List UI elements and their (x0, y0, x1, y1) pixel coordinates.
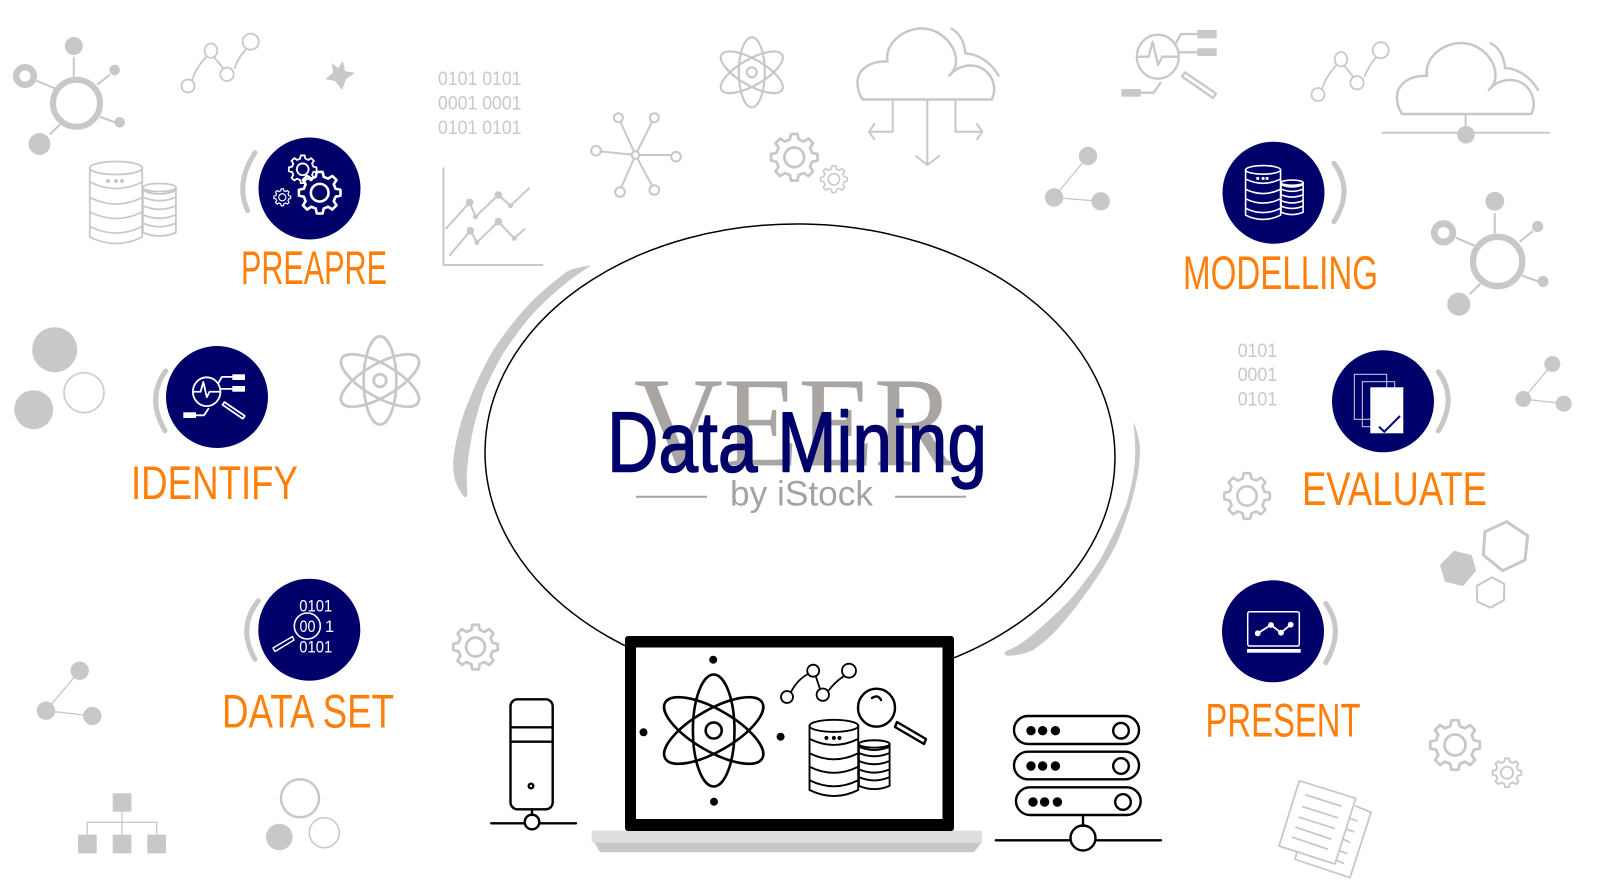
icon: documents (1279, 781, 1371, 878)
icon: server rack (996, 716, 1161, 850)
icon: share lower left (37, 662, 102, 725)
icon: share right (1515, 356, 1572, 412)
label: DATA SET (222, 684, 394, 738)
bracket (156, 371, 166, 431)
icon: atom top (715, 37, 789, 107)
icon: documents with check (1354, 374, 1403, 433)
binary text top left: 0001 0001 (438, 94, 522, 114)
label: MODELLING (1183, 246, 1378, 299)
icon: path chain top left (182, 34, 259, 92)
laptop (592, 636, 982, 852)
step: MODELLING (1183, 142, 1378, 299)
binary text top left: 0101 0101 (438, 118, 522, 139)
icon: gears (274, 155, 340, 213)
bracket (247, 601, 258, 659)
label: EVALUATE (1302, 462, 1487, 515)
icon: gears top centre (771, 134, 847, 193)
navy badge (1222, 580, 1324, 682)
bracket (243, 153, 255, 211)
step: PRESENT (1206, 580, 1360, 746)
bracket (1326, 603, 1335, 663)
icon: circles bottom (266, 779, 339, 850)
label: PRESENT (1206, 694, 1360, 746)
icon: gear left centre (453, 625, 498, 669)
central ellipse (481, 219, 1119, 691)
icon: laptop chart (1247, 612, 1301, 653)
icon: database top left (90, 162, 176, 244)
icon: magnifier analysis top right (1121, 30, 1217, 98)
laptop database (810, 720, 890, 796)
icon: binary magnifier: 00 (300, 618, 316, 636)
label: IDENTIFY (131, 456, 298, 509)
step: DATA SET (222, 579, 394, 738)
icon: desktop tower (491, 699, 576, 829)
navy badge (258, 579, 360, 681)
icon: gear right (1224, 473, 1270, 519)
navy badge (258, 138, 360, 240)
icon: org chart (78, 793, 166, 853)
laptop atom (640, 656, 785, 806)
laptop chain (781, 664, 856, 703)
laptop base (592, 831, 982, 852)
icon: database (1246, 166, 1303, 219)
icon: line chart (444, 168, 542, 265)
icon: binary magnifier: 1 (325, 618, 334, 636)
binary text right: 0101 (1238, 390, 1277, 410)
label: PREAPRE (241, 241, 387, 294)
icon: binary magnifier: 0101 (299, 638, 332, 656)
laptop magnifier (858, 689, 926, 744)
navy badge (1222, 142, 1324, 244)
bracket (1438, 372, 1448, 431)
icon: path chain top right (1312, 42, 1389, 101)
icon: circles left (14, 327, 104, 429)
navy badge (1332, 350, 1434, 452)
icon: hexagons (1440, 522, 1528, 608)
binary text right: 0001 (1238, 365, 1277, 386)
icon: atom left (334, 336, 426, 425)
step: PREAPRE (241, 138, 387, 294)
icon: magnifier analysis (183, 374, 245, 419)
icon: binary magnifier: 0101 (299, 597, 332, 615)
icon: cloud with network node (1383, 43, 1549, 143)
title: Data Mining (607, 396, 987, 491)
step: EVALUATE (1302, 350, 1487, 515)
icon: binary magnifier (273, 597, 334, 656)
watermark: by iStock (730, 475, 874, 514)
laptop screen (625, 636, 954, 831)
icon: gears lower right (1430, 720, 1521, 787)
step: IDENTIFY (131, 346, 298, 509)
binary text right (1238, 341, 1277, 410)
navy badge (166, 346, 268, 448)
binary text right: 0101 (1238, 341, 1277, 362)
icon: share top centre (1045, 147, 1110, 210)
crescent right (1005, 422, 1140, 656)
icon: star (325, 61, 355, 90)
icon: star network (591, 113, 681, 197)
icon: network hub right (1434, 192, 1549, 316)
watermark: VEER (634, 352, 957, 494)
crescent left (453, 265, 592, 497)
bracket (1334, 163, 1344, 222)
icon: network hub top left (16, 37, 125, 155)
binary text top left (438, 69, 522, 139)
icon: cloud with arrows (858, 28, 998, 165)
binary text top left: 0101 0101 (438, 69, 522, 90)
